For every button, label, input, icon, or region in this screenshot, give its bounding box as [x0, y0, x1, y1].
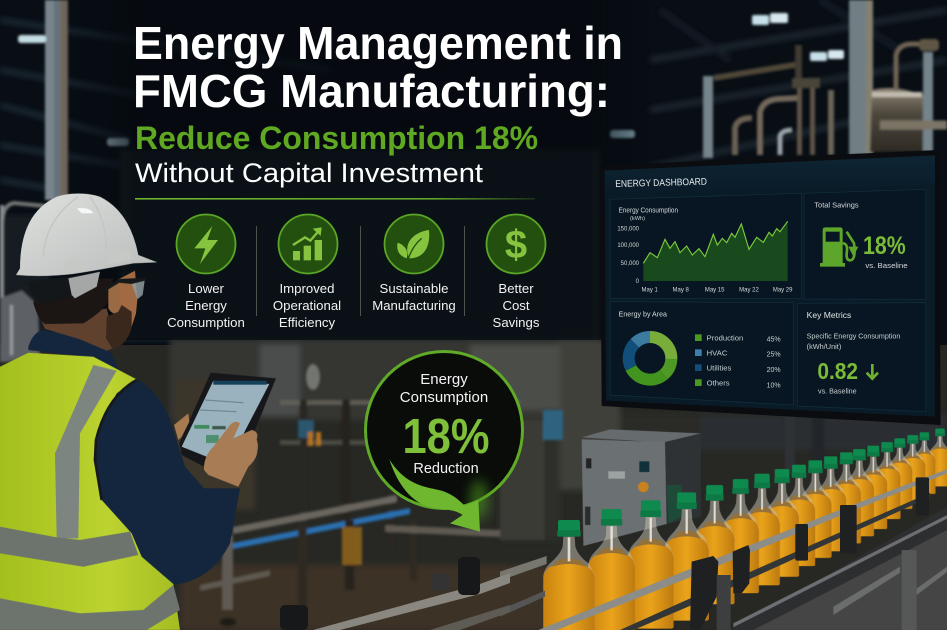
monitor pole — [785, 415, 795, 475]
panel: energy consumption chart: May 29 — [773, 287, 793, 293]
energy reduction callout: Reduction — [413, 461, 479, 477]
donut legend: HVAC — [707, 348, 728, 357]
title line 1: Energy Management in — [133, 17, 623, 69]
conveyor with bottles — [500, 429, 947, 630]
pipes upper right — [703, 76, 713, 158]
panel: total savings: Total Savings — [814, 201, 859, 210]
bottle row — [543, 429, 947, 630]
icon: down arrow — [867, 364, 878, 379]
panel: key metrics: Specific Energy Consumption — [807, 331, 900, 340]
panel: key metrics: Key Metrics — [807, 310, 852, 320]
energy reduction callout: Energy — [420, 371, 468, 388]
panel: energy consumption chart: 100,000 — [617, 243, 640, 249]
panel: energy consumption chart: (kWh) — [630, 216, 645, 222]
benefit: sustainable manufacturing — [372, 214, 456, 313]
energy reduction callout: Consumption — [400, 389, 488, 406]
energy dashboard monitor — [600, 150, 941, 425]
panel: energy consumption chart: 0 — [636, 279, 640, 285]
benefit: better cost savings: $ — [505, 223, 527, 267]
helmet strap — [28, 275, 82, 304]
panel: energy consumption chart: 150,000 — [617, 226, 640, 232]
control box — [582, 429, 701, 546]
donut legend — [695, 334, 781, 389]
donut legend: 45% — [767, 336, 781, 343]
face — [115, 271, 137, 337]
beard — [106, 305, 132, 350]
benefit: better cost savings — [486, 214, 546, 330]
benefit: improved operational efficiency: Efficiency — [279, 315, 335, 330]
panel: key metrics — [797, 303, 926, 412]
panel: energy consumption chart: 50,000 — [621, 261, 640, 267]
neck — [42, 308, 117, 351]
benefit: better cost savings: Better — [498, 281, 534, 296]
benefit: better cost savings: Savings — [493, 315, 540, 330]
callout arrow — [389, 459, 480, 532]
title block — [133, 17, 623, 188]
panel: key metrics: 0.82 — [817, 358, 858, 384]
title line 2: FMCG Manufacturing: — [133, 65, 610, 117]
tanks left — [0, 290, 40, 362]
benefit icons row — [167, 214, 546, 330]
donut legend: 25% — [767, 352, 781, 359]
panel: total savings: 18% — [863, 232, 906, 260]
panel: energy by area — [610, 302, 793, 405]
steel conveyor base — [730, 507, 947, 630]
tablet — [179, 373, 276, 467]
benefit: sustainable manufacturing: Sustainable — [380, 281, 448, 296]
guide rails — [500, 469, 947, 630]
panel: total savings: vs. Baseline — [865, 261, 908, 270]
mid rack — [280, 400, 520, 405]
ear — [108, 282, 120, 314]
donut chart — [620, 328, 680, 389]
hands — [174, 413, 258, 487]
lights — [18, 35, 46, 43]
dashboard heading: ENERGY DASHBOARD — [615, 177, 707, 190]
foreground rail — [280, 557, 510, 630]
panel: energy consumption chart: May 15 — [705, 287, 725, 293]
column left — [45, 0, 68, 200]
benefit: lower energy consumption: Energy — [185, 298, 227, 313]
donut legend: 20% — [767, 367, 781, 374]
benefit: lower energy consumption — [167, 214, 245, 330]
panel: energy by area: Energy by Area — [619, 309, 668, 318]
benefit: lower energy consumption: Consumption — [167, 315, 245, 330]
panel: energy consumption chart — [610, 193, 802, 298]
hair — [33, 278, 113, 324]
panel: energy consumption chart: May 8 — [673, 287, 689, 293]
dark title backdrop — [60, 0, 650, 340]
glasses — [101, 278, 146, 299]
benefit: improved operational efficiency: Operational — [273, 298, 341, 313]
white subtitle: Without Capital Investment — [135, 158, 484, 188]
panel: key metrics: (kWh/Unit) — [807, 342, 841, 351]
energy reduction callout: 18% — [402, 410, 490, 464]
energy reduction callout — [366, 352, 522, 532]
benefit: improved operational efficiency: Improved — [280, 281, 334, 296]
worker with tablet — [0, 193, 276, 630]
donut legend: Production — [707, 334, 743, 343]
green subtitle: Reduce Consumption 18% — [135, 120, 538, 156]
panel: energy consumption chart: May 22 — [739, 287, 759, 293]
panel: total savings — [804, 189, 926, 299]
shirt and arm — [28, 330, 240, 584]
panel: energy consumption chart: Energy Consumption — [619, 207, 678, 214]
donut legend: Others — [707, 378, 730, 387]
donut legend: Utilities — [707, 364, 732, 373]
benefit: better cost savings: Cost — [502, 298, 530, 313]
donut legend: 10% — [767, 382, 781, 389]
hi-vis vest — [0, 353, 180, 630]
panel: key metrics: vs. Baseline — [818, 387, 857, 396]
benefit: lower energy consumption: Lower — [188, 281, 225, 296]
benefit: sustainable manufacturing: Manufacturing — [372, 298, 456, 313]
callout glow — [470, 480, 488, 520]
icon: fuel pump — [820, 227, 858, 267]
panel: energy consumption chart: May 1 — [642, 287, 658, 293]
helmet — [16, 193, 157, 276]
benefit: improved operational efficiency — [273, 214, 341, 330]
